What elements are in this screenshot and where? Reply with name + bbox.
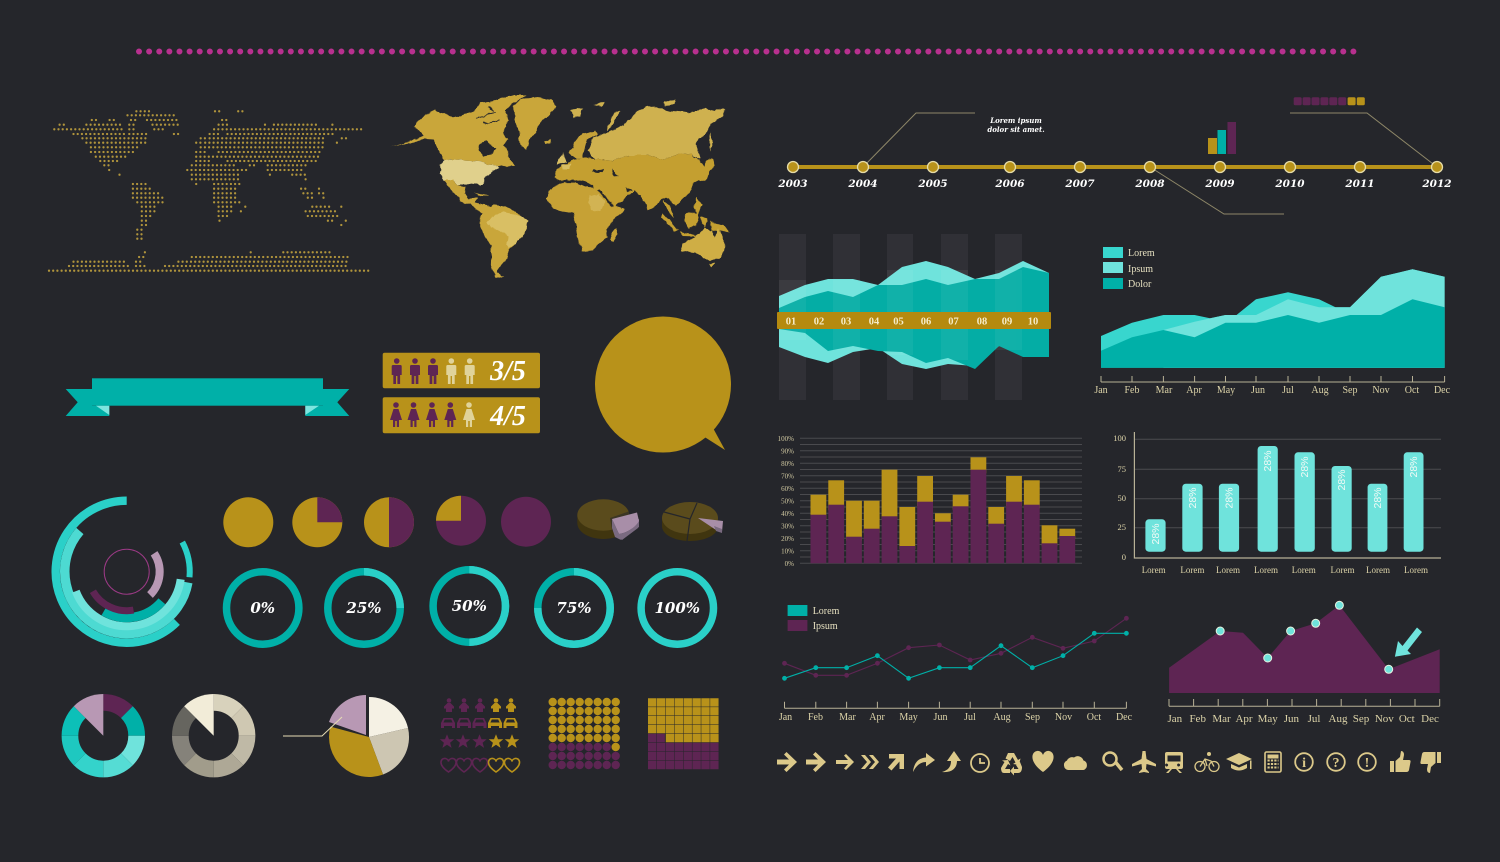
stacked bar chart [778,435,1082,568]
purple area month labels: Mar [1212,713,1231,725]
area data points [1216,601,1393,673]
line series ipsum [782,616,1129,678]
area month labels: Jun [1251,385,1265,396]
area month labels: Jul [1282,385,1294,396]
rounded bars [1145,446,1424,552]
3D pie A [577,499,639,540]
wave numbers [786,316,1038,328]
people ratio 3 of 5 [383,353,540,388]
dotted world map [49,111,370,271]
icon: graduation cap [1226,753,1252,770]
rounded bar category labels [1142,565,1428,575]
mini progress squares [1294,97,1365,105]
rounded bar values: 28% [1150,523,1162,545]
baby icons [444,698,516,712]
wave numbers: 06 [921,316,931,328]
stacked axis labels: 80% [781,460,794,468]
area month labels: Jan [1094,385,1108,396]
rounded bar values: 28% [1336,469,1348,491]
line month labels: Feb [808,712,823,723]
wave stripes [779,234,1022,400]
rounded bar category labels: Lorem [1404,565,1428,575]
wave numbers: 07 [948,316,959,328]
rounded bar y labels: 50 [1118,493,1126,503]
rounded bar y labels: 75 [1118,464,1126,474]
purple area month labels: Jun [1284,713,1300,725]
rounded bar y labels: 100 [1113,433,1126,443]
purple area month labels: Dec [1421,713,1439,725]
icon row [777,751,1441,776]
dot percentage grid [553,702,616,765]
area layers [1101,269,1445,368]
timeline nodes [788,162,1442,172]
rounded bar category labels: Lorem [1142,565,1166,575]
stacked bars gold [810,457,1075,549]
area legend [1103,247,1155,290]
people ratio 4 of 5 [383,397,540,433]
icon: small arrow [836,754,854,770]
wave numbers: 08 [977,316,987,328]
icon: curved arrow [913,753,935,772]
wave numbers: 02 [814,316,824,328]
purple area month labels: May [1258,713,1278,725]
stacked axis labels: 60% [781,485,794,493]
pie row quarter steps [223,496,551,547]
stacked axis labels: 20% [781,535,794,543]
ribbon banner [66,378,349,416]
line month labels: Jul [964,712,976,723]
area month labels: May [1217,385,1235,396]
timeline years: 2007 [1064,178,1095,190]
icon: north-east arrow [888,754,904,770]
line legend: Ipsum [813,621,838,632]
timeline years: 2008 [1134,178,1165,190]
timeline years: 2011 [1344,178,1375,190]
stacked axis labels: 90% [781,448,794,456]
wave light layer [779,261,1049,369]
people ratio 3 of 5: 3/5 [489,356,526,387]
timeline years: 2006 [994,178,1025,190]
icon: clock [971,754,989,772]
progress ring 50%: 50% [452,597,487,615]
heart icons [441,758,520,772]
wave numbers: 05 [893,316,904,328]
callout pie [283,695,409,777]
stacked axis labels: 30% [781,522,794,530]
icon: exclamation: ! [1365,756,1369,771]
purple area month labels: Nov [1375,713,1394,725]
people ratio 4 of 5: 4/5 [489,401,526,432]
line chart [779,605,1133,723]
line legend [788,605,840,632]
timeline note [987,116,1045,134]
rounded bar category labels: Lorem [1180,565,1204,575]
progress ring 100%: 100% [655,599,700,617]
area month labels [1094,385,1451,396]
pictogram table [440,698,520,772]
rounded bar values: 28% [1187,487,1199,509]
line legend: Lorem [813,606,840,617]
icon: double chevron [861,755,879,769]
icon: arrow [777,752,797,772]
area axis [1101,376,1445,382]
line month labels [779,712,1133,723]
rounded bar y labels: 0 [1122,552,1126,562]
area month labels: Sep [1342,385,1358,396]
progress ring 0% [227,572,299,644]
line month labels: Nov [1055,712,1072,723]
radial arc chart [56,501,190,643]
area month labels: Apr [1186,385,1202,396]
progress ring 0%: 0% [250,599,275,617]
purple area month labels: Apr [1235,713,1253,725]
icon: question: ? [1332,756,1340,771]
icon: thumbs down [1420,752,1441,773]
icon: thumbs up [1390,751,1411,772]
title dotted rule [139,48,1354,54]
line month labels: Apr [869,712,885,723]
timeline note: Lorem ipsum [989,116,1042,125]
line series lorem [782,631,1129,681]
mirrored wave chart [777,234,1051,400]
icon: plane [1132,751,1156,773]
timeline years: 2003 [777,178,808,190]
progress ring 25%: 25% [345,599,382,617]
purple area month labels: Oct [1399,713,1415,725]
area month labels: Oct [1405,385,1419,396]
progress ring 75%: 75% [556,599,592,617]
wave numbers: 03 [841,316,851,328]
car icons [441,718,518,728]
timeline [777,97,1452,214]
timeline callout lines [863,113,1437,214]
wave numbers: 01 [786,316,796,328]
segmented donut grey [172,694,255,777]
area month labels: Mar [1156,385,1173,396]
icon: cyclist [1195,752,1219,772]
progress ring 75% [538,572,610,644]
area legend: Ipsum [1128,264,1153,275]
timeline years: 2005 [917,178,948,190]
stacked axis labels [778,435,794,568]
icon: cloud [1064,756,1087,770]
rounded bar y labels [1113,433,1126,562]
icon: info [1295,753,1313,771]
line month labels: May [899,712,918,723]
stacked axis labels: 0% [785,560,794,568]
area month labels: Aug [1311,385,1329,396]
wave stripe overlay [779,270,1022,360]
star icons [440,734,519,748]
icon: curved up arrow [942,751,961,772]
arrow pointer [1395,628,1422,657]
line month labels: Jan [779,712,792,723]
stacked axis labels: 40% [781,510,794,518]
icon: train [1165,752,1183,773]
icon: question [1327,753,1345,771]
purple area chart [1167,601,1440,725]
wave band [777,312,1051,329]
purple area axis [1169,699,1440,706]
purple area month labels: Jan [1167,713,1183,725]
stacked axis labels: 70% [781,472,794,480]
rounded bar category labels: Lorem [1216,565,1240,575]
purple area month labels [1167,713,1439,725]
area legend: Dolor [1128,279,1152,290]
rounded bar values: 28% [1262,450,1274,472]
timeline years: 2010 [1274,178,1305,190]
progress ring 100% [641,572,714,644]
timeline years [777,178,1452,190]
rounded bar category labels: Lorem [1330,565,1354,575]
area month labels: Dec [1434,385,1451,396]
icon: calculator [1265,752,1281,772]
rounded bar values [1150,450,1420,545]
wave numbers: 04 [869,316,880,328]
progress ring 50% [433,570,506,642]
stacked axis labels: 50% [781,498,794,506]
rounded bar y labels: 25 [1118,522,1126,532]
rounded bar category labels: Lorem [1292,565,1316,575]
purple area month labels: Jul [1308,713,1320,725]
purple area month labels: Sep [1353,713,1370,725]
timeline years: 2012 [1421,178,1452,190]
solid world map [390,95,730,277]
rounded bar values: 28% [1299,456,1311,478]
rounded bar category labels: Lorem [1254,565,1278,575]
area legend: Lorem [1128,248,1155,259]
purple area month labels: Feb [1189,713,1206,725]
purple area month labels: Aug [1329,713,1348,725]
icon: exclamation [1358,753,1376,771]
line axis [784,702,1126,708]
line month labels: Dec [1116,712,1133,723]
mini bar chart [1208,122,1236,154]
rounded bar values: 28% [1224,487,1236,509]
timeline years: 2004 [847,178,878,190]
square percentage grid [648,702,719,765]
area month labels: Feb [1124,385,1140,396]
progress ring 25% [328,572,400,644]
timeline years: 2009 [1204,178,1235,190]
rounded bar category labels: Lorem [1366,565,1390,575]
timeline note: dolor sit amet. [987,125,1045,134]
wave numbers: 09 [1002,316,1012,328]
line month labels: Sep [1025,712,1040,723]
rounded bar values: 28% [1372,487,1384,509]
area month labels: Nov [1372,385,1390,396]
3D pie B [662,502,723,541]
stacked area chart [1094,247,1451,396]
stacked axis labels: 10% [781,548,794,556]
line month labels: Aug [993,712,1011,723]
icon: recycle [1001,753,1022,776]
rounded bar chart [1113,432,1441,575]
rounded bar values: 28% [1408,456,1420,478]
stacked axis labels: 100% [778,435,794,443]
line month labels: Oct [1087,712,1101,723]
stacked bars purple [810,470,1075,563]
icon: arrow [806,752,826,772]
icon: info: i [1302,756,1306,771]
segmented donut teal [62,694,145,777]
line month labels: Jun [934,712,947,723]
timeline axis [793,165,1437,169]
wave numbers: 10 [1028,316,1038,328]
wave teal layer [779,267,1049,369]
speech bubble [595,316,731,452]
icon: heart [1032,751,1054,772]
icon: magnifier [1104,752,1122,770]
line month labels: Mar [839,712,856,723]
